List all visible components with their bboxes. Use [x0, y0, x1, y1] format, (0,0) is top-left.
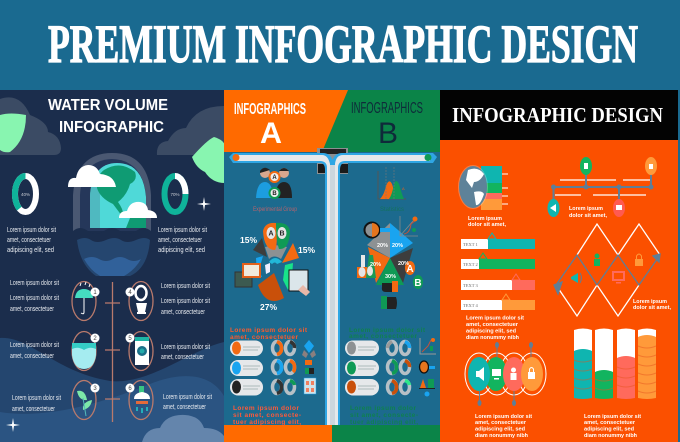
text stacked bars: adipiscing elit, sed [584, 426, 634, 432]
chart: A radial: 27% [260, 302, 277, 312]
chart: B hexagon [357, 216, 423, 309]
text blocks lower: Lorem ipsum dolor sit [163, 392, 212, 401]
heading B: B [378, 117, 398, 150]
chart: B hexagon: B [414, 278, 422, 289]
number badges: 5 [128, 336, 132, 342]
panel: infographic design [440, 90, 678, 442]
text blocks upper: adipiscing elit, sed [158, 245, 205, 254]
chart: B hexagon: A [406, 264, 414, 275]
small icons B [419, 338, 436, 396]
text blocks lower [10, 278, 212, 413]
text blocks upper [7, 225, 207, 254]
text circles: amet, consectetuer [475, 420, 527, 426]
icon: washing machine [135, 337, 149, 365]
icon: experimental group people: A [272, 175, 277, 181]
text blocks upper: amet, consectetuer [158, 235, 202, 244]
number badges: 4 [128, 290, 132, 296]
diamond icons [571, 254, 643, 284]
text blocks upper: Lorem ipsum dolor sit [7, 225, 56, 234]
donut 70%: 70% [170, 192, 180, 197]
text B lower [350, 405, 418, 426]
text B mid heading: amet, consectetuer [349, 333, 417, 340]
text blocks lower: Lorem ipsum dolor sit [10, 293, 59, 302]
chart: A radial [235, 223, 315, 312]
text A lower [233, 405, 301, 426]
text A mid heading: Lorem ipsum dolor sit [230, 327, 308, 334]
donut 70% [164, 176, 186, 212]
text B lower: sit amet, consecte- [350, 412, 418, 419]
heading A: INFOGRAPHICS [234, 101, 306, 118]
panel: A/B infographics [224, 90, 440, 442]
chart: A radial: B [279, 230, 285, 238]
timeline [548, 157, 657, 217]
star [197, 197, 211, 211]
chart: B hexagon: 30% [385, 274, 396, 280]
pills B [345, 340, 379, 396]
text globe: dolor sit amet, [468, 222, 507, 228]
text diamonds [633, 299, 672, 311]
number badges: 1 [93, 290, 97, 296]
text blocks upper: adipiscing elit, sed [7, 245, 54, 254]
donuts A and B [272, 342, 410, 394]
water bowl [77, 238, 150, 276]
chart: B hexagon: 20% [392, 243, 403, 249]
text blocks lower: amet, consectetuer [163, 402, 206, 411]
text below bars [466, 316, 524, 341]
text below bars: adipiscing elit, sed [466, 328, 516, 334]
chart: B hexagon: 20% [370, 262, 381, 268]
donut 40% [15, 176, 36, 212]
globe [73, 153, 151, 236]
text timeline [569, 206, 608, 219]
text stacked bars [584, 414, 641, 439]
progress bars: TEXT 2 [463, 262, 478, 267]
text stacked bars: Lorem ipsum dolor sit [584, 414, 641, 420]
text stacked bars: diam nonummy nibh [584, 433, 637, 439]
overlapping circles [465, 342, 546, 406]
star lower [6, 418, 20, 432]
text B lower: Lorem ipsum dolor [350, 405, 416, 412]
text A lower: sit amet, consecte- [233, 412, 301, 419]
icon: umbrella [75, 282, 93, 314]
text B mid heading: Lorem ipsum dolor sit [349, 327, 426, 334]
chart: B hexagon: 20% [377, 243, 388, 249]
text blocks lower: Lorem ipsum dolor sit [161, 281, 210, 290]
stacked bars [574, 328, 656, 399]
text blocks lower: Lorem ipsum dolor sit [10, 278, 59, 287]
progress bars: TEXT 3 [463, 283, 479, 288]
text blocks lower: Lorem ipsum dolor sit [161, 342, 210, 351]
heading: INFOGRAPHIC [59, 119, 164, 136]
heading A: A [260, 117, 282, 150]
heading B: INFOGRAPHICS [351, 100, 423, 117]
T pipe [229, 148, 437, 425]
text blocks lower: amet, consectetuer [161, 307, 205, 316]
progress bars: TEXT 1 [463, 242, 478, 247]
text A mid heading [230, 327, 308, 341]
chart: A radial: 15% [298, 245, 315, 255]
pills A [230, 340, 263, 396]
text blocks upper: amet, consectetuer [7, 235, 51, 244]
text blocks lower: amet, consectetuer [10, 304, 54, 313]
icon: shower [134, 386, 150, 413]
number badges: 2 [93, 336, 97, 342]
text globe [468, 216, 507, 228]
label experimental group: Experimental Group [253, 207, 298, 213]
icon: experimental group people: B [272, 191, 277, 197]
small icons A [302, 340, 316, 394]
chart: B hexagon: 20% [398, 261, 409, 267]
diamonds [554, 224, 660, 316]
text circles [475, 414, 532, 439]
text blocks lower: amet, consectetuer [161, 352, 204, 361]
clouds white [68, 165, 157, 218]
text circles: Lorem ipsum dolor sit [475, 414, 532, 420]
wave backgrounds [0, 338, 224, 442]
text blocks upper: Lorem ipsum dolor sit [158, 225, 207, 234]
leaves [0, 114, 225, 183]
text diamonds: Lorem ipsum [633, 299, 667, 305]
text A lower: Lorem ipsum dolor [233, 405, 299, 412]
timeline axis [72, 282, 153, 422]
text below bars: diam nonummy nibh [466, 335, 519, 341]
number badges: 3 [93, 386, 97, 392]
text blocks lower: Lorem ipsum dolor sit [10, 340, 59, 349]
text circles: adipiscing elit, sed [475, 426, 525, 432]
icon: plant [77, 391, 92, 416]
chart: A radial: 15% [240, 235, 257, 245]
text diamonds: dolor sit amet, [633, 305, 672, 311]
chart: statistics mountains [378, 167, 406, 199]
heading B [351, 100, 423, 150]
progress bars: TEXT 4 [463, 303, 479, 308]
icon: toilet [136, 286, 147, 314]
text globe: Lorem ipsum [468, 216, 502, 222]
clouds dark [0, 97, 224, 155]
chart: A radial: A [268, 230, 274, 238]
progress bars [461, 233, 535, 310]
text circles: diam nonummy nibh [475, 433, 528, 439]
text below bars: Lorem ipsum dolor sit [466, 316, 524, 322]
orange header [224, 90, 348, 152]
globe with bars [458, 165, 508, 210]
text B lower: tuer adipiscing elit, [350, 419, 418, 426]
panel: water volume [0, 90, 225, 442]
text stacked bars: amet, consectetuer [584, 420, 636, 426]
icon: experimental group people [256, 168, 292, 199]
heading [48, 97, 168, 136]
text timeline: dolor sit amet, [569, 213, 608, 219]
icon: water glass [72, 343, 96, 369]
text below bars: amet, consectetuer [466, 322, 519, 328]
lighter wave [0, 376, 224, 442]
text A lower: tuer adipiscing elit, [233, 419, 301, 426]
heading: WATER VOLUME [48, 97, 168, 114]
text blocks lower: amet, consectetuer [10, 351, 54, 360]
bottom bands [224, 425, 440, 442]
chart: statistics mountains: A [402, 186, 405, 191]
text blocks lower: amet, consectetuer [12, 404, 55, 413]
label statistics: Statistics [380, 207, 404, 213]
bottom cloud [142, 415, 224, 442]
text A mid heading: amet, consectetuer [230, 334, 298, 341]
text blocks lower: Lorem ipsum dolor sit [161, 296, 210, 305]
donut 40%: 40% [21, 192, 30, 197]
text blocks lower: Lorem ipsum dolor sit [12, 393, 61, 402]
number badges [90, 288, 134, 392]
number badges: 6 [128, 386, 132, 392]
text timeline: Lorem ipsum [569, 206, 603, 212]
text B mid heading [349, 327, 426, 340]
heading A [234, 101, 306, 150]
